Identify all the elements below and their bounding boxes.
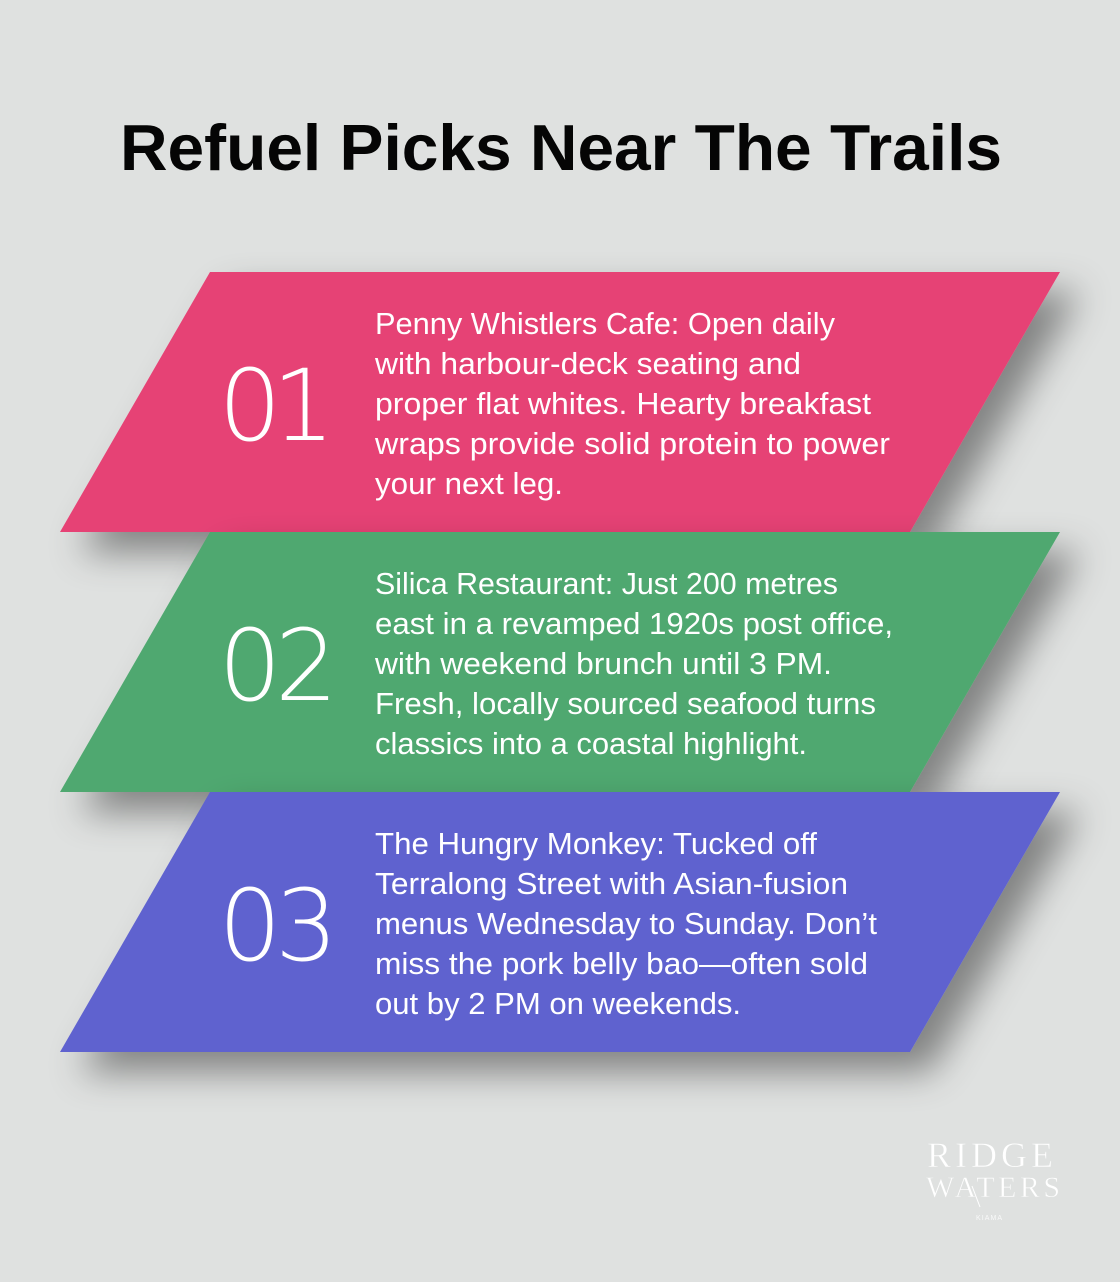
description text: with weekend brunch until 3 PM.	[374, 646, 832, 681]
description text: with harbour-deck seating and	[374, 346, 801, 381]
description text	[375, 826, 877, 1021]
description text	[374, 566, 893, 761]
panel: The Hungry Monkey	[60, 792, 1060, 1052]
description text: The Hungry Monkey: Tucked off	[375, 826, 817, 861]
description text	[374, 306, 890, 501]
description text: proper flat whites. Hearty breakfast	[375, 386, 871, 421]
number 01: 01	[218, 349, 335, 464]
description text: your next leg.	[375, 466, 563, 501]
panel: Penny Whistlers Cafe	[60, 272, 1060, 532]
logo: Ridge Waters Kiama: WATERS	[926, 1171, 1060, 1204]
number 02: 02	[218, 609, 338, 724]
description text: out by 2 PM on weekends.	[375, 986, 741, 1021]
logo: Ridge Waters Kiama: KIAMA	[976, 1215, 1002, 1222]
description text: menus Wednesday to Sunday. Don’t	[375, 906, 877, 941]
description text: Penny Whistlers Cafe: Open daily	[375, 306, 835, 341]
description text: miss the pork belly bao—often sold	[375, 946, 868, 981]
pink parallelogram	[60, 272, 1060, 532]
description text: classics into a coastal highlight.	[375, 726, 807, 761]
description text: Silica Restaurant: Just 200 metres	[375, 566, 838, 601]
description text: east in a revamped 1920s post office,	[375, 606, 893, 641]
title: Refuel Picks Near The Trails	[120, 111, 1002, 184]
green parallelogram	[60, 532, 1060, 792]
number 03: 03	[218, 869, 338, 984]
description text: Fresh, locally sourced seafood turns	[375, 686, 876, 721]
description text: wraps provide solid protein to power	[374, 426, 890, 461]
purple parallelogram	[60, 792, 1060, 1052]
description text: Terralong Street with Asian-fusion	[375, 866, 848, 901]
logo: Ridge Waters Kiama: RIDGE	[927, 1135, 1053, 1175]
panel: Silica Restaurant	[60, 532, 1060, 792]
logo: Ridge Waters Kiama	[926, 1135, 1060, 1222]
